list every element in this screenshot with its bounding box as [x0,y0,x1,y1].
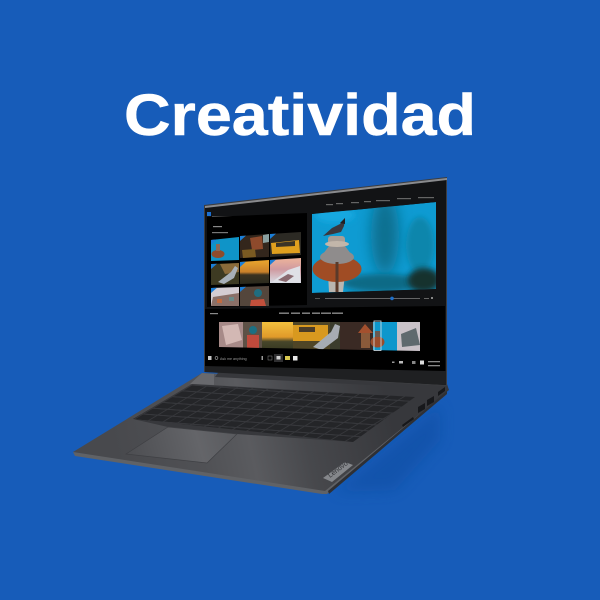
thumbnail: pink town [270,258,301,283]
screen lid [204,177,447,386]
thumbnail: statue [211,263,239,285]
lenovo tag [323,460,353,482]
filmstrip playhead [374,321,381,350]
taskbar: Ask me anything [220,357,247,361]
taskbar [208,354,440,366]
thumbnail: sunset [240,260,269,284]
thumbnail: hiker [240,286,269,306]
preview image [312,202,436,293]
laptop base [73,373,449,494]
media panel [207,213,307,307]
hinge bar [215,370,418,387]
laptop [73,177,449,494]
thumbnail: van [270,232,301,257]
lenovo tag: Lenovo [327,460,350,480]
icon: lamp and bird [312,218,362,292]
thumbnail: house [240,234,269,258]
thumbnail: white town [211,287,239,306]
filmstrip [219,322,420,352]
lower bezel [205,366,446,385]
app window top bar [207,197,434,218]
trackpad [126,427,237,463]
title: Creatividad [124,83,476,148]
thumbnail: lamp [211,237,239,261]
storyboard toolbar [210,312,343,314]
playback slider [315,297,433,300]
laptop shadow [335,405,440,492]
keyboard [133,385,415,442]
ports [402,387,445,427]
thumbnail corner markers [211,234,276,293]
storyboard panel [205,306,445,371]
